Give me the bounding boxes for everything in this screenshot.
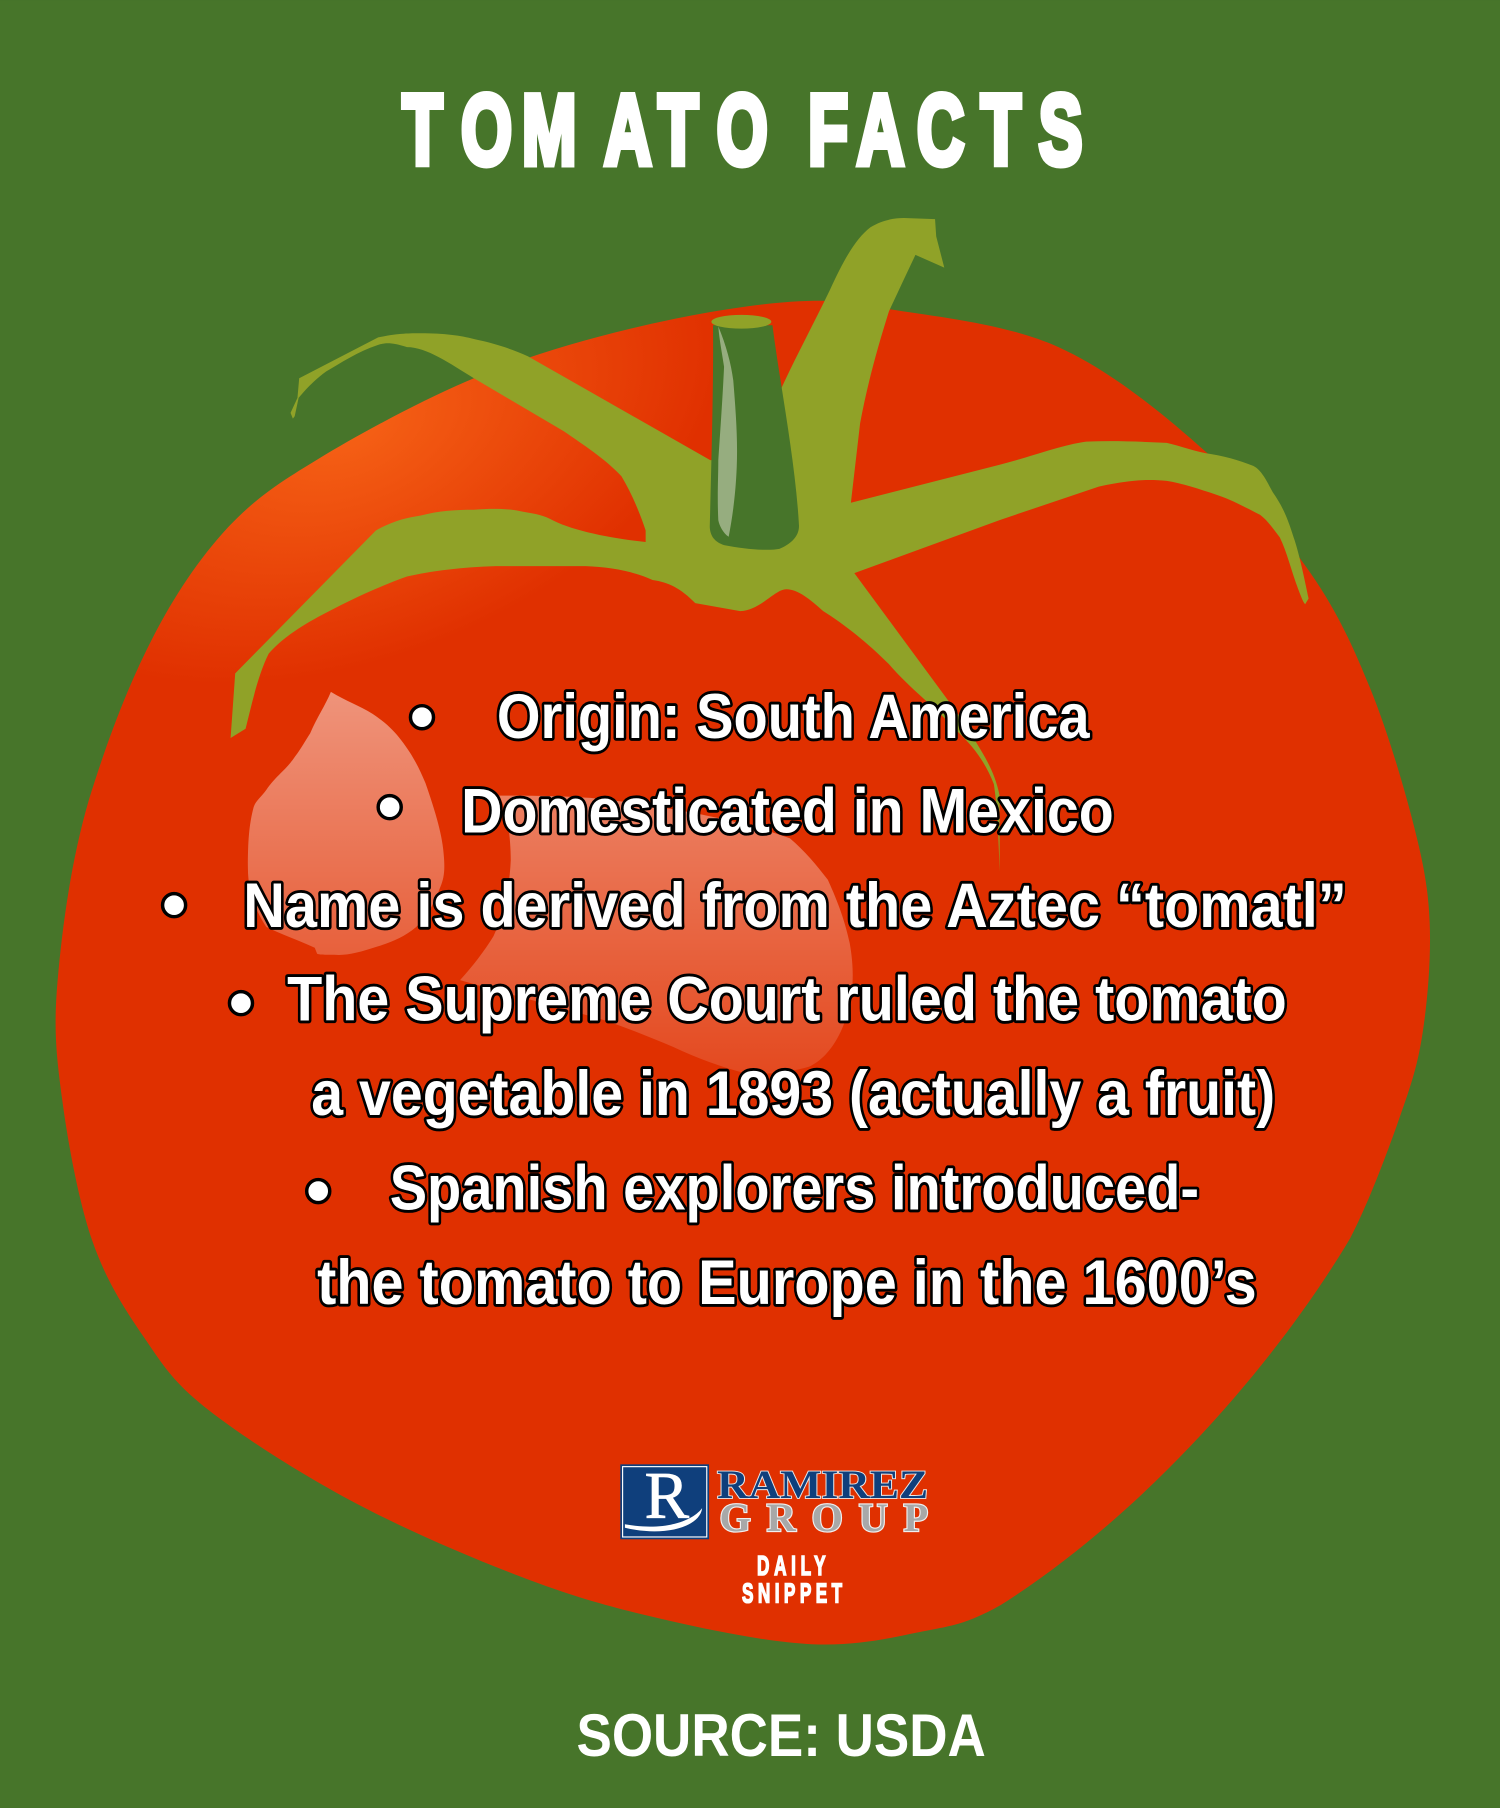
highlight: right — [460, 796, 853, 1074]
logo: GROUP — [719, 1495, 928, 1540]
title: TOMATO FACTS — [403, 74, 1082, 185]
fact 5: Spanish explorers introduced- — [390, 1154, 1199, 1224]
stem — [710, 325, 799, 550]
highlight: left — [248, 692, 444, 955]
fact 4 — [229, 964, 1287, 1129]
source: SOURCE: USDA — [576, 1702, 986, 1769]
logo tagline — [742, 1550, 842, 1609]
stem top — [711, 315, 771, 329]
logo mark: R — [645, 1458, 690, 1532]
fact 4: a vegetable in 1893 (actually a fruit) — [311, 1059, 1275, 1129]
logo wordmark: RAMIREZ — [717, 1462, 928, 1507]
fact 2: Domesticated in Mexico — [461, 777, 1114, 847]
calyx leaves — [231, 218, 1309, 872]
fact 5 — [307, 1154, 1257, 1318]
fact 5: the tomato to Europe in the 1600’s — [317, 1248, 1257, 1318]
logo tagline: SNIPPET — [742, 1577, 842, 1609]
facts list — [163, 682, 1347, 1318]
fact 3: Name is derived from the Aztec “tomatl” — [243, 871, 1347, 941]
fact 4: The Supreme Court ruled the tomato — [287, 964, 1287, 1034]
tomato illustration — [56, 218, 1430, 1645]
fact 1: Origin: South America — [497, 682, 1090, 752]
logo — [620, 1458, 928, 1609]
logo mark — [620, 1458, 709, 1539]
stem highlight — [718, 326, 737, 537]
logo tagline: DAILY — [757, 1550, 826, 1581]
tomato body — [56, 301, 1430, 1645]
